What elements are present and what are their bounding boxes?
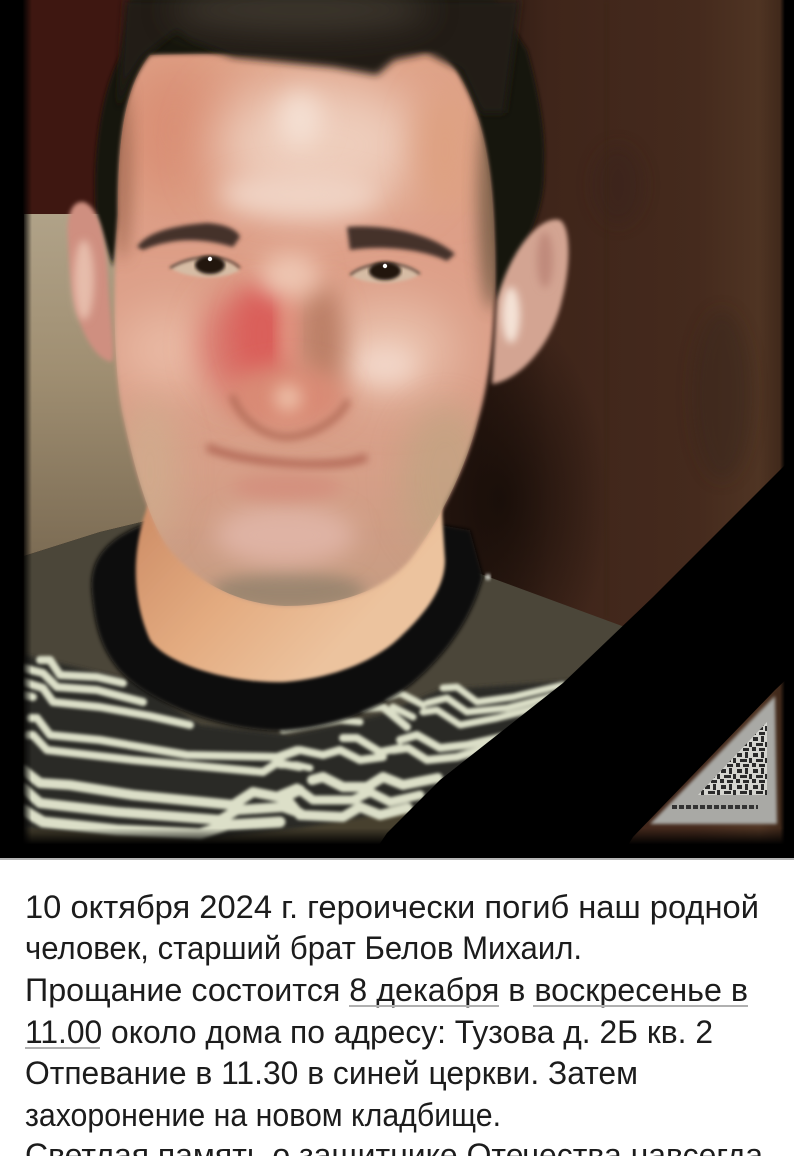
hair highlight: [170, 0, 430, 32]
black mourning ribbon: [381, 466, 784, 842]
announcement text: 11.00 около дома по адресу: Тузова д. 2Б кв. 2: [25, 1014, 713, 1050]
skin shading: [112, 60, 506, 612]
beige panel left: [24, 214, 148, 556]
date and time underlines: [25, 1005, 748, 1049]
mouth: [207, 447, 367, 500]
shirt: [23, 522, 622, 842]
announcement text: захоронение на новом кладбище.: [25, 1097, 501, 1133]
wallpaper background: [0, 0, 794, 858]
hair front: [118, 0, 520, 113]
announcement text: Прощание состоится 8 декабря в воскресенье в: [25, 972, 748, 1008]
right ear: [492, 220, 568, 384]
memorial photograph: [0, 0, 794, 858]
announcement text: Отпевание в 11.30 в синей церкви. Затем: [25, 1055, 638, 1091]
right eyebrow: [347, 226, 455, 261]
face: [112, 0, 520, 612]
nose outline: [232, 395, 348, 437]
photo bottom rule: [0, 858, 794, 860]
neck: [136, 480, 445, 682]
left ear: [68, 202, 113, 362]
wall panel top left: [20, 0, 130, 214]
announcement text: [25, 889, 763, 1156]
QR card: [650, 696, 777, 824]
shirt stripes: [23, 660, 563, 834]
left eyebrow: [137, 223, 240, 250]
announcement text: 10 октября 2024 г. героически погиб наш родной: [25, 889, 759, 925]
frame edges: [0, 0, 794, 858]
announcement text: человек, старший брат Белов Михаил.: [25, 930, 582, 966]
right eye: [350, 262, 420, 283]
left eye: [170, 256, 240, 277]
collar highlight: [485, 574, 491, 580]
black collar: [91, 500, 483, 731]
hair back: [93, 32, 546, 298]
